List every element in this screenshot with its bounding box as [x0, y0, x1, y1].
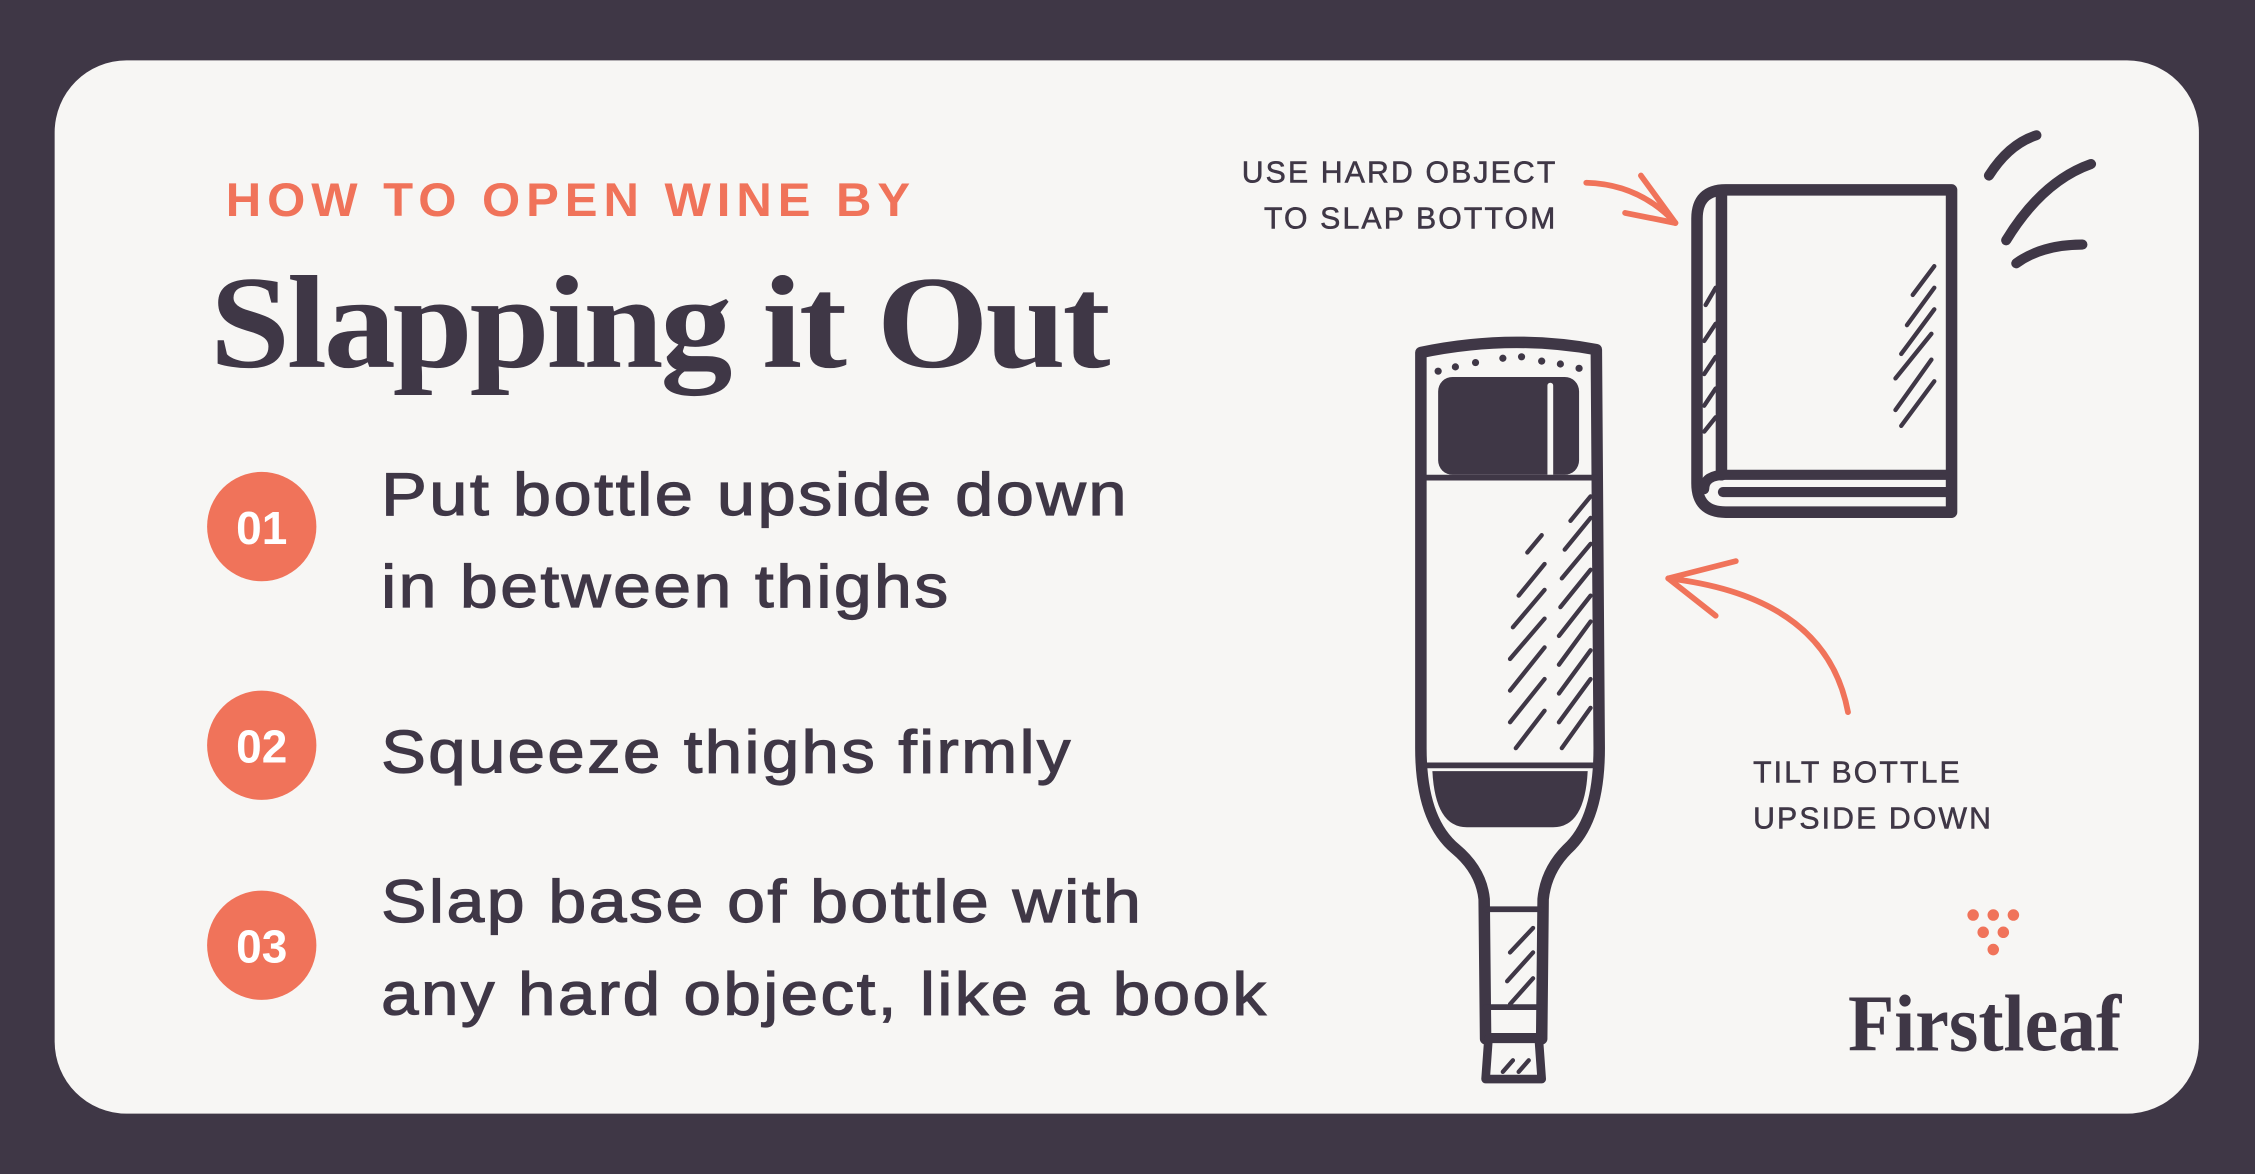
logo: Firstleaf: Firstleaf	[1848, 979, 2122, 1068]
subtitle: HOW TO OPEN WINE BY	[226, 174, 916, 227]
title: Slapping it Out	[210, 249, 1110, 396]
step 01: Put bottle upside down	[381, 460, 1129, 528]
step 01: 01	[236, 502, 287, 554]
step 03: 03	[236, 920, 287, 973]
logo: grape icon	[1967, 909, 2019, 955]
arrow: to book	[1586, 176, 1675, 223]
callout: tilt bottle	[1753, 757, 1993, 836]
callout: use hard object: TO SLAP BOTTOM	[1264, 203, 1558, 236]
step 02	[207, 691, 1073, 800]
step 03: Slap base of bottle with	[381, 867, 1143, 935]
icon: upside-down bottle	[1421, 342, 1599, 1079]
callout: tilt bottle: TILT BOTTLE	[1753, 757, 1962, 790]
callout: use hard object	[1242, 157, 1558, 236]
step 01	[207, 460, 1129, 620]
step 03	[207, 867, 1268, 1027]
step 02: 02	[236, 721, 287, 773]
icon: motion lines	[1989, 135, 2091, 263]
icon: book	[1697, 190, 1952, 512]
step 03: any hard object, like a book	[381, 959, 1268, 1027]
step 01: in between thighs	[381, 552, 951, 620]
step 02: Squeeze thighs firmly	[381, 718, 1073, 786]
callout: tilt bottle: UPSIDE DOWN	[1753, 803, 1993, 836]
callout: use hard object: USE HARD OBJECT	[1242, 157, 1558, 190]
arrow: to bottle	[1668, 561, 1848, 712]
